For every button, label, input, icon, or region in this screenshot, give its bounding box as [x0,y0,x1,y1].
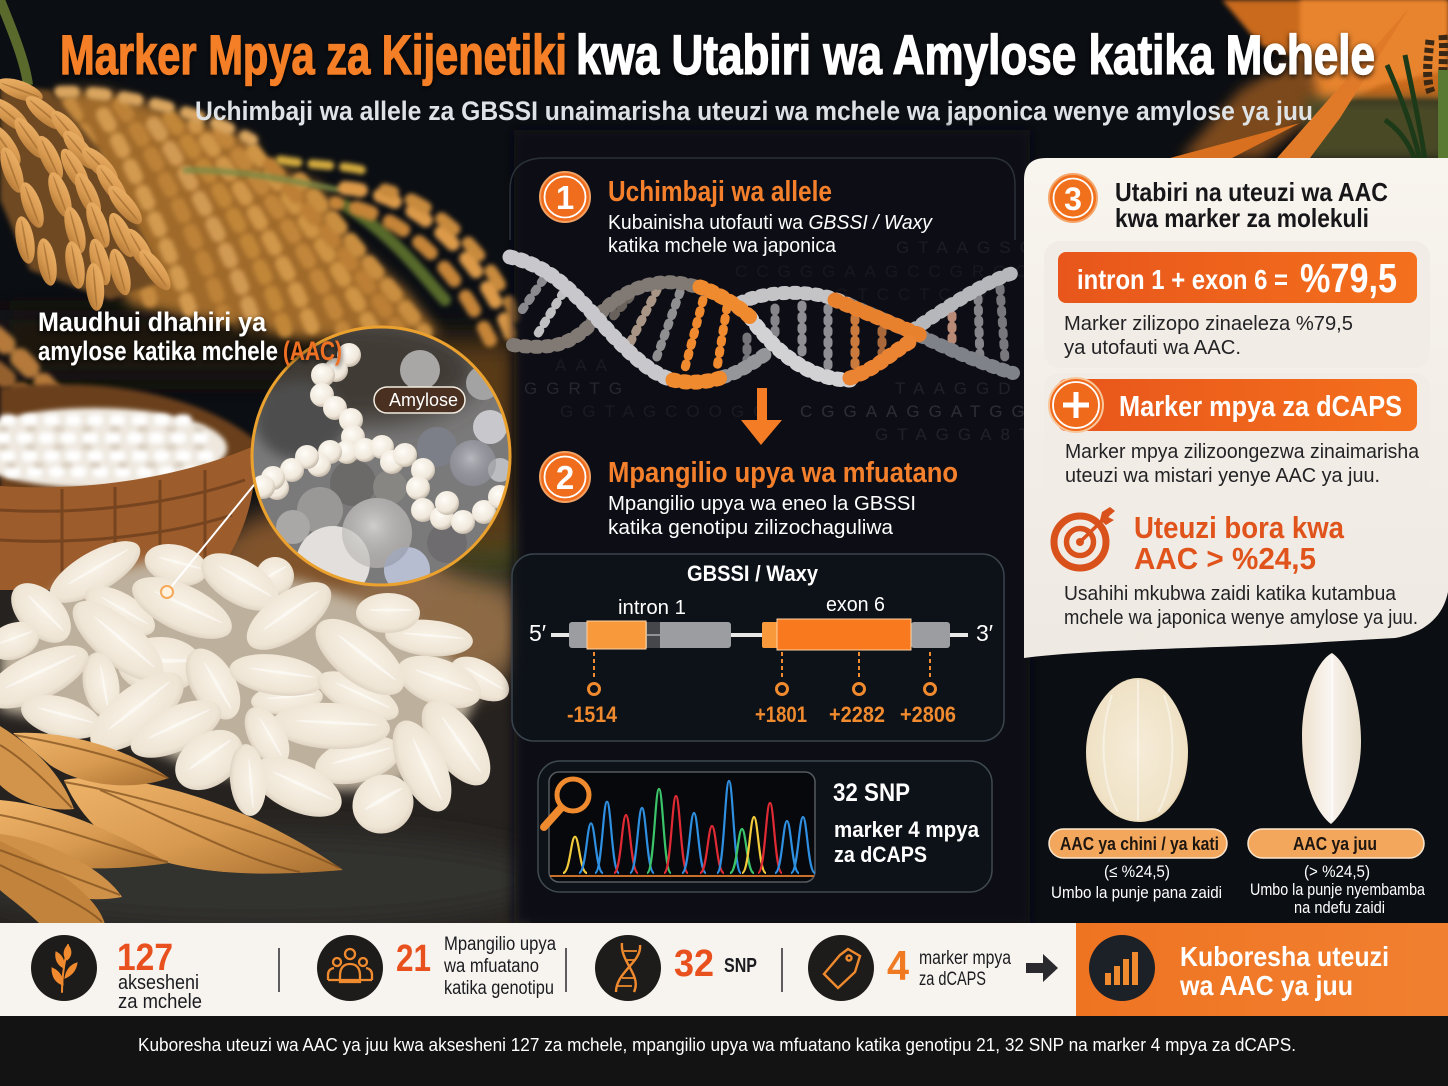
panel: prediction and selection: Uteuzi bora kwa [1134,510,1345,545]
arrow: to outcome [1026,954,1058,982]
stat: SNP: SNP [724,955,757,977]
icon: plus [1049,378,1103,432]
panel: prediction and selection: AAC > %24,5 [1134,541,1316,576]
panel: dark centre column backing [514,130,1030,925]
faint nucleotide letters: AAA [555,356,616,375]
panel: prediction and selection: Utabiri na uteuzi wa AAC [1115,177,1388,207]
icon: target [1054,507,1115,568]
card: new dCAPS markers: uteuzi wa mistari yenye AAC ya juu. [1065,464,1380,487]
step 1: allele mining: Kubainisha utofauti wa GBSSI / Waxy [608,212,933,234]
number badge 1: 1 [556,179,574,216]
orange helix segments [673,287,925,382]
SNP positions [588,652,936,694]
DNA double helix [510,257,1013,382]
stat: genotypes: 21 [396,938,431,980]
subtitle: Uchimbaji wa allele za GBSSI unaimarisha uteuzi wa mchele wa japonica wenye amylose ya juu [195,96,1313,126]
panel: prediction and selection: Usahihi mkubwa zaidi katika kutambua [1064,583,1397,605]
step 2: resequencing: katika genotipu zilizochaguliwa [608,517,894,539]
faint nucleotide letters: GTCCTCT7 [835,285,998,304]
stat: genotypes: katika genotipu [444,978,554,999]
step 1: allele mining [540,172,933,257]
number badge 2: 2 [556,459,574,496]
card: variance explained: intron 1 + exon 6 = [1077,264,1288,295]
icon: magnifying glass [544,779,589,827]
faint nucleotide letters: CCGGGAAGCCGROO [735,262,1038,281]
stat strip [0,923,1076,1016]
step 2: resequencing: Mpangilio upya wa mfuatano [608,457,958,489]
outcome banner: wa AAC ya juu [1179,970,1353,1001]
card: variance explained: %79,5 [1300,255,1397,301]
panel: sequencing result: za dCAPS [834,842,927,867]
panel: GBSSI gene diagram: +1801 [755,702,807,727]
panel: sequencing result [538,761,992,892]
rice bowl [0,384,255,590]
arrow: down [741,388,782,445]
stat: SNP: 32 [674,943,714,985]
stat: genotypes [317,934,556,1001]
grain comparison: low or intermediate AAC [1049,678,1227,902]
callout line [161,480,258,598]
faint nucleotide letters: CGGAAGGATGGD [800,402,1055,421]
stat: dCAPS markers [808,935,1011,1001]
stat: SNP [595,935,757,1001]
outcome banner [1076,923,1448,1016]
panel: GBSSI gene diagram: 3′ [976,620,993,646]
top-right rice plant background [1170,0,1448,160]
stat: accessions [31,935,202,1013]
step 2: resequencing [540,452,958,539]
panel: sequencing result: marker 4 mpya [834,817,980,842]
faint nucleotide letters: GGRTG [524,379,631,398]
grain comparison: high AAC: Umbo la punje nyembamba [1250,881,1426,899]
panel: GBSSI gene diagram: +2282 [829,702,885,727]
step 1: allele mining: katika mchele wa japonica [608,235,837,257]
outcome banner: Kuboresha uteuzi [1180,941,1389,972]
amylose tag: Amylose [389,390,458,410]
number badge 3 [1049,174,1097,222]
strand C [850,305,1013,373]
step 1: allele mining: Uchimbaji wa allele [608,176,832,208]
panel: GBSSI gene diagram: 5′ [529,620,546,646]
panel: GBSSI gene diagram: exon 6 [826,594,885,616]
icon: DNA [616,943,640,992]
icon: bar chart [1105,952,1138,985]
panel: GBSSI gene diagram [512,554,1004,741]
card: new dCAPS markers: Marker mpya zilizoongezwa zinaimarisha [1065,440,1420,463]
strand A front [510,257,673,380]
amylose tag [374,387,465,413]
grain comparison: high AAC: (> %24,5) [1304,863,1370,881]
panel: rice photo foreground [0,73,517,924]
panel: prediction and selection [1024,158,1448,658]
background: blurred rice panicles [0,0,518,420]
stat: genotypes: Mpangilio upya [444,934,556,955]
grain comparison: high AAC [1248,653,1426,917]
panel: GBSSI gene diagram: intron 1 [618,597,686,619]
label: apparent amylose content [38,307,342,366]
panel: GBSSI gene diagram: +2806 [900,702,956,727]
panel: sequencing result: 32 SNP [833,779,910,807]
stat: dCAPS markers: za dCAPS [919,969,986,990]
icon: people [328,949,372,982]
card: variance explained: Marker zilizopo zinaeleza %79,5 [1064,312,1353,335]
chromatogram [549,772,815,882]
grain comparison: high AAC: na ndefu zaidi [1294,899,1385,917]
stat: dCAPS markers: 4 [887,942,910,989]
card: variance explained [1044,241,1430,368]
stat: accessions: aksesheni [118,972,199,994]
panel: GBSSI gene diagram: GBSSI / Waxy [687,561,819,586]
grain comparison: high AAC: AAC ya juu [1293,834,1377,854]
strand B front [750,317,850,380]
stat: accessions: za mchele [118,991,202,1013]
faint nucleotide letters: TAAGGD [895,379,1020,398]
label: apparent amylose content: amylose katika mchele [38,336,278,366]
faint nucleotide letters: GTAAGSG [896,238,1042,257]
grain comparison: low or intermediate AAC: AAC ya chini / ya kati [1060,834,1219,854]
faint nucleotide letters: GTAGGA8T [875,425,1038,444]
title [60,23,1375,86]
card: variance explained: ya utofauti wa AAC. [1064,336,1241,359]
icon: tag [824,949,860,988]
faint nucleotide letters [524,238,1055,444]
grain comparison: low or intermediate AAC: (≤ %24,5) [1104,863,1170,881]
amylose bead chain [251,343,512,534]
magnifier: amylose chains [161,315,512,600]
stat: genotypes: wa mfuatano [443,956,539,977]
gene track [551,619,968,650]
front sharp panicle [0,73,176,312]
card: new dCAPS markers [1044,373,1430,497]
number badge 1 [540,172,590,222]
label: apparent amylose content: (AAC) [283,336,342,366]
strand back [513,282,750,347]
panel: GBSSI gene diagram: -1514 [567,702,618,727]
footer summary: Kuboresha uteuzi wa AAC ya juu kwa aksesheni 127 za mchele, mpangilio upya wa mfuatano katika genotipu 21, 32 SNP na marker 4 mpya za dCAPS. [138,1035,1296,1055]
number badge 3: 3 [1064,181,1082,217]
card: new dCAPS markers: Marker mpya za dCAPS [1119,391,1402,423]
footer summary [0,1016,1448,1086]
magnifier ring [252,327,510,585]
step 2: resequencing: Mpangilio upya wa eneo la GBSSI [608,493,916,515]
stat: dCAPS markers: marker mpya [919,948,1011,969]
icon: wheat [52,945,77,992]
title: Marker Mpya za Kijenetiki [60,23,567,86]
rice grain pile [0,529,517,845]
grain comparison: low or intermediate AAC: Umbo la punje pana zaidi [1051,884,1222,902]
golden rice panicles in foreground [0,726,343,924]
panel: prediction and selection: mchele wa japonica wenye amylose ya juu. [1064,607,1418,629]
panel outline: centre section top [510,158,1015,240]
label: apparent amylose content: Maudhui dhahiri ya [38,307,267,337]
faint nucleotide letters: GGTAGCOOGG [560,402,775,421]
number badge 2 [540,452,590,502]
panel: prediction and selection: kwa marker za molekuli [1115,203,1369,233]
stat: accessions: 127 [117,937,173,979]
DNA rungs [520,280,1005,372]
